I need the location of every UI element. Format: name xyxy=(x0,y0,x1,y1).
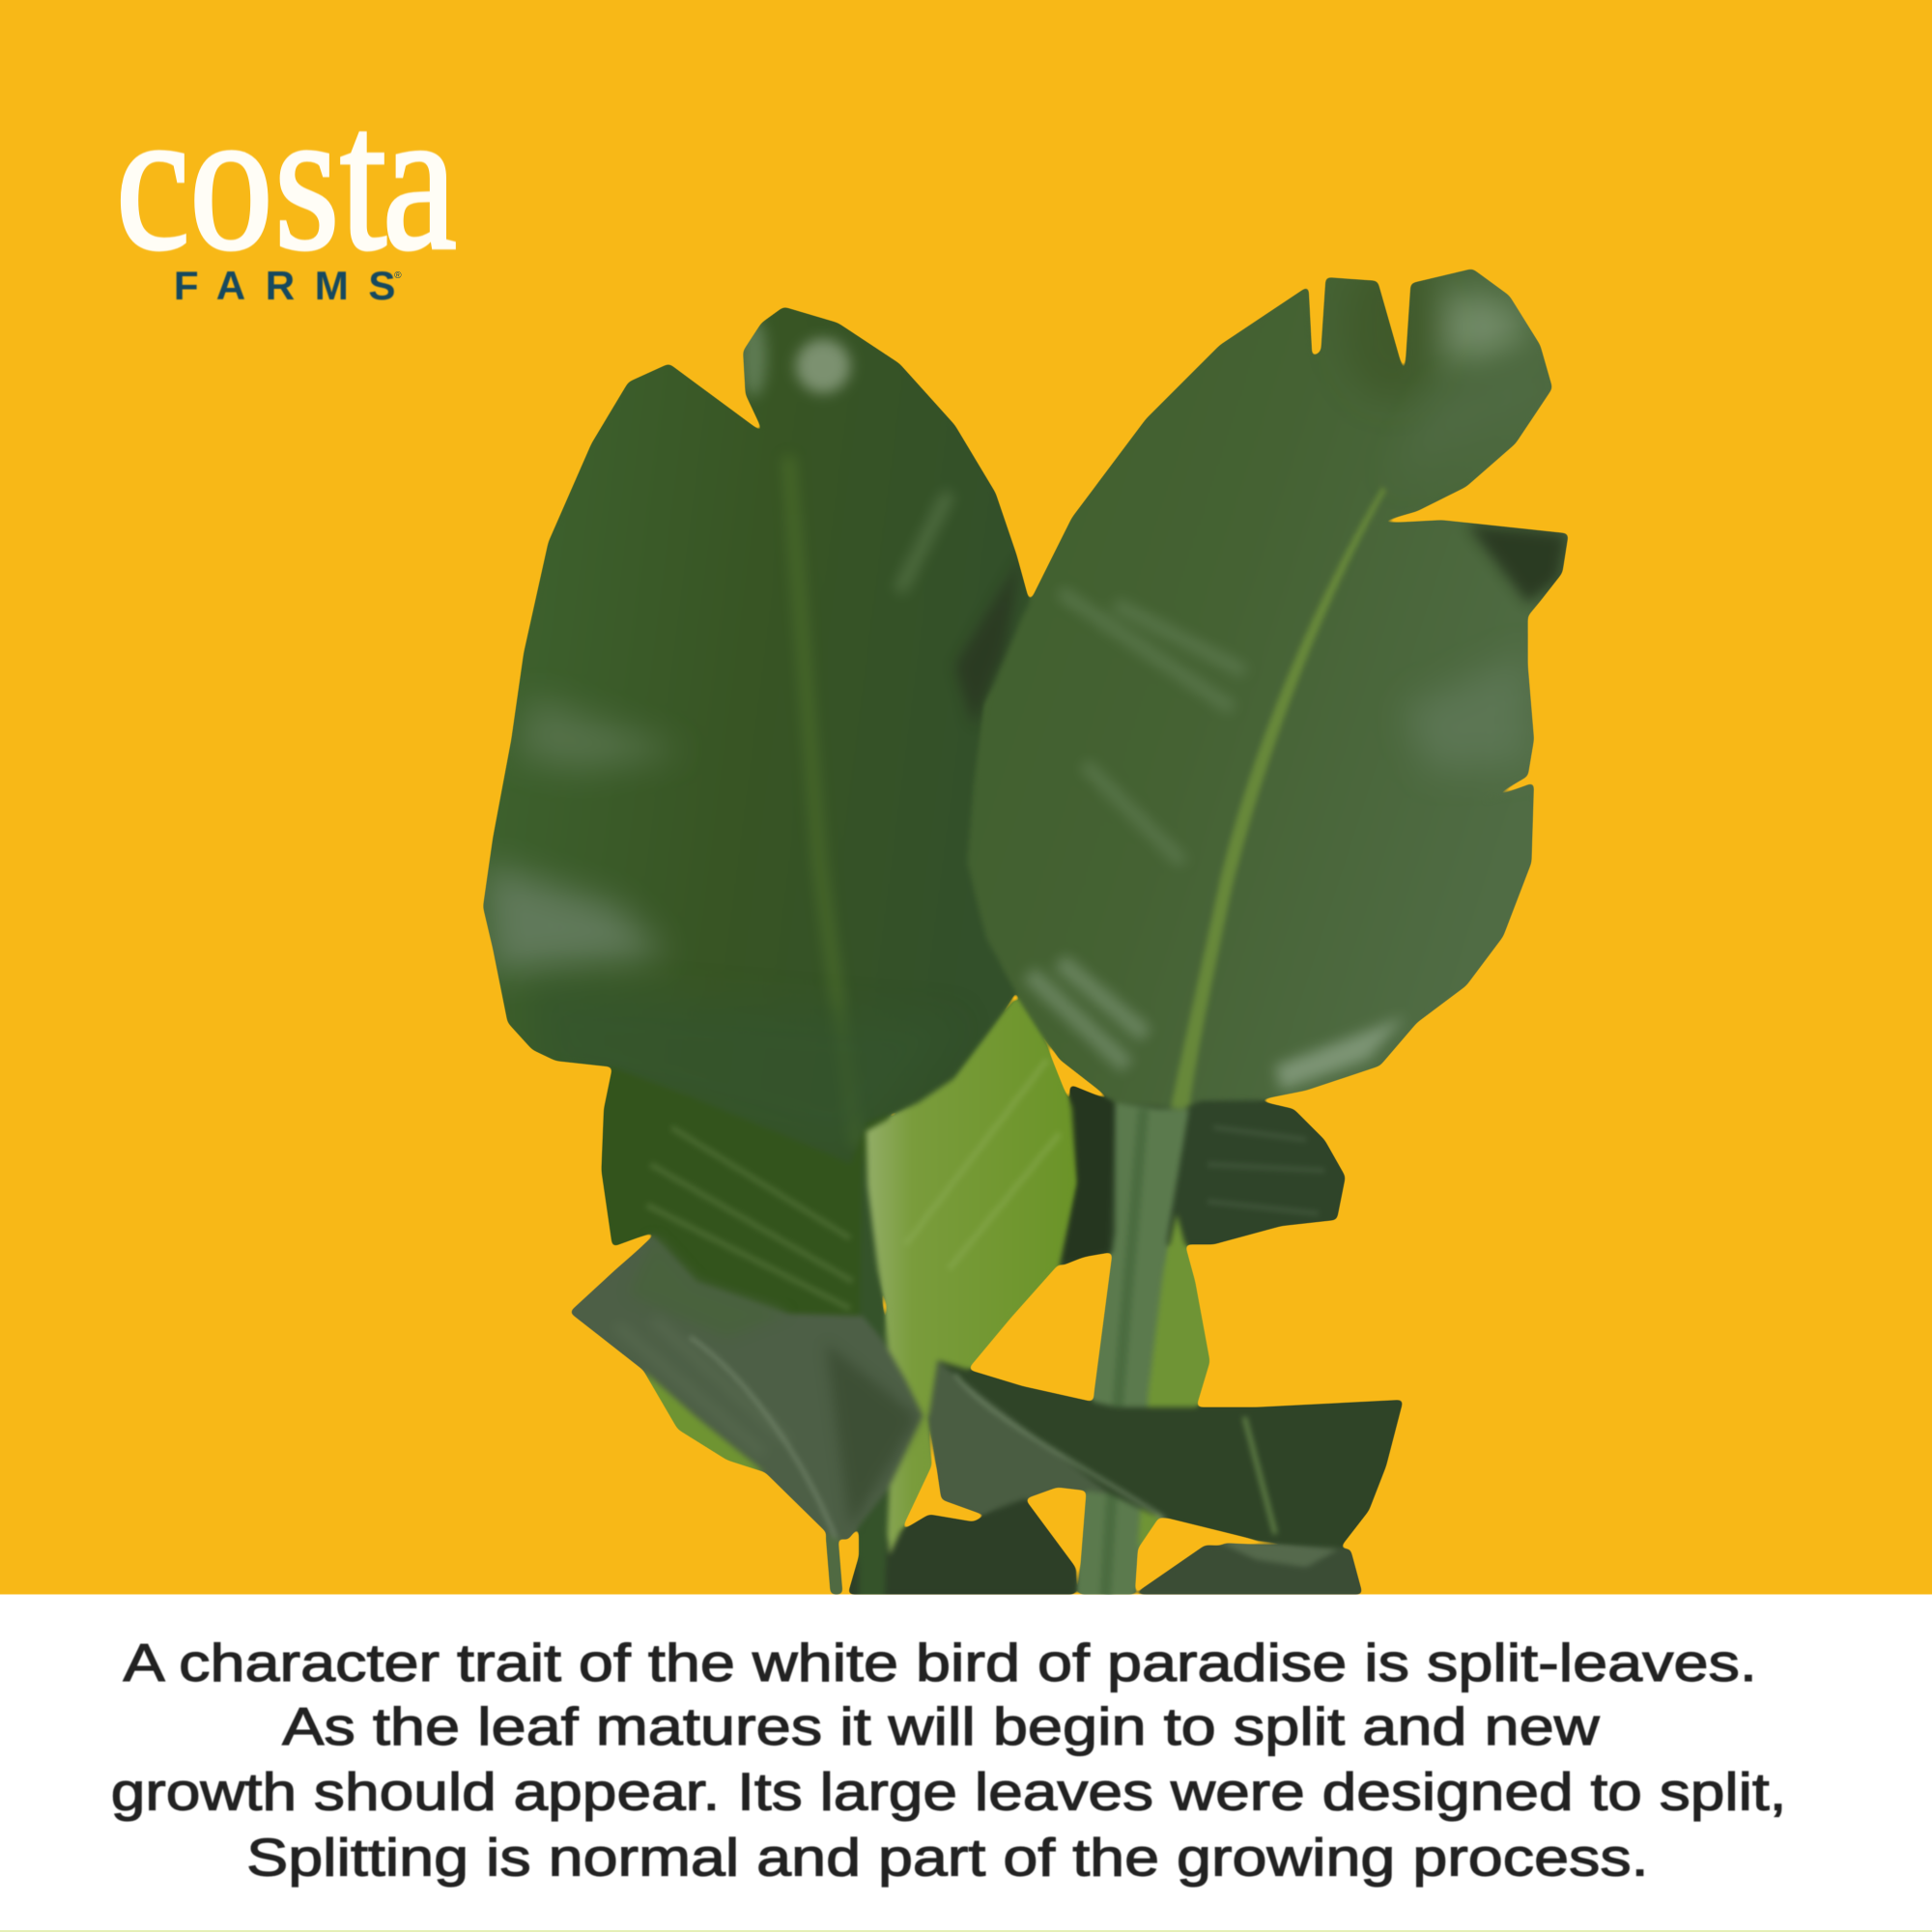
stem: central stalk xyxy=(859,1146,894,1595)
stem: small petiole xyxy=(826,1534,842,1595)
plant illustration xyxy=(483,252,1569,1595)
logo wordmark: farms: FARMS xyxy=(174,263,395,308)
stem: main stalk xyxy=(1078,1103,1189,1595)
white caption panel xyxy=(0,1595,1932,1929)
stem: light green sheath xyxy=(1127,1213,1210,1555)
leaf: large left leaf xyxy=(483,307,1030,1164)
logo wordmark: costa: costa xyxy=(116,67,457,292)
leaf: bottom right dark leaf xyxy=(1133,1545,1363,1595)
caption line 4: Splitting is normal and part of the growing process. xyxy=(246,1827,1649,1887)
logo registered mark: ® xyxy=(394,270,402,281)
caption line 2: As the leaf matures it will begin to split and new xyxy=(282,1696,1600,1756)
caption text xyxy=(111,1633,1786,1887)
leaf: back right dark leaf xyxy=(1060,1084,1346,1266)
caption line 3: growth should appear. Its large leaves were designed to split, xyxy=(111,1762,1786,1822)
leaf: large right leaf xyxy=(967,252,1569,1109)
leaf: lime sliver under drooping leaf xyxy=(643,1370,765,1472)
leaf: lower left drooping leaf xyxy=(569,1236,923,1540)
leaf: lower back left dark leaf xyxy=(601,1067,894,1337)
bottom edge strip xyxy=(0,1930,1932,1932)
leaf: bottom right drooping leaf xyxy=(929,1360,1404,1567)
caption line 1: A character trait of the white bird of paradise is split-leaves. xyxy=(124,1633,1757,1692)
leaf: bright lime leaf xyxy=(867,998,1076,1555)
leaf: bottom centre dark leaf xyxy=(848,1495,1076,1595)
logo: Costa Farms xyxy=(116,67,457,308)
